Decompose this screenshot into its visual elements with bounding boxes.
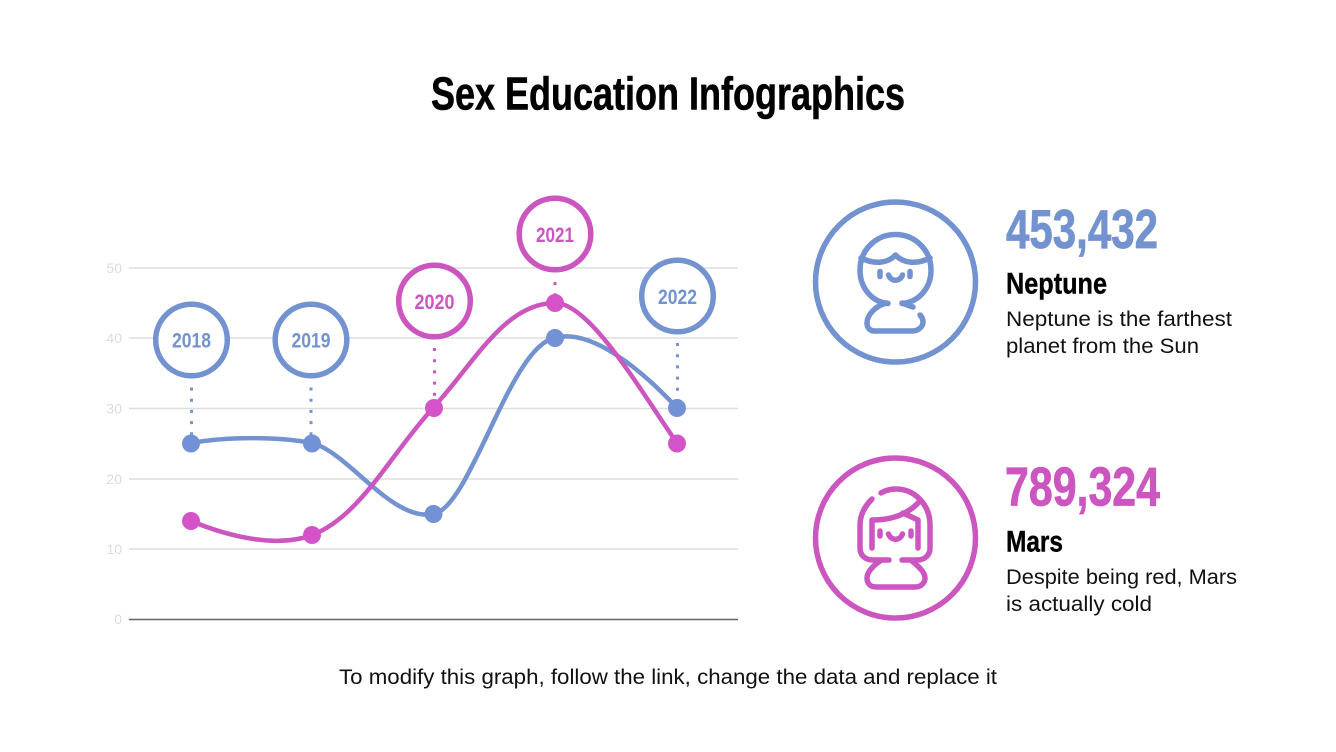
stat: Neptune: planet from the Sun bbox=[1006, 335, 1199, 358]
y axis labels: 30 bbox=[106, 400, 122, 416]
icon: girl in circle bbox=[816, 458, 976, 618]
line chart bbox=[106, 198, 738, 627]
icon: boy in circle bbox=[816, 202, 976, 362]
y axis labels: 20 bbox=[106, 471, 122, 487]
stat: Mars: 789,324 bbox=[1005, 456, 1160, 518]
year marker 2022: 2022 bbox=[658, 286, 697, 309]
stat: Mars: is actually cold bbox=[1006, 593, 1152, 616]
year marker 2019 bbox=[275, 304, 347, 436]
y axis labels: 0 bbox=[114, 611, 122, 627]
stat: Mars: Mars bbox=[1006, 526, 1063, 558]
stat: Neptune: 453,432 bbox=[1006, 198, 1158, 260]
year marker 2020: 2020 bbox=[414, 291, 454, 314]
y axis labels: 50 bbox=[106, 260, 122, 276]
blue series line bbox=[191, 336, 677, 515]
year marker 2021 bbox=[519, 198, 591, 296]
year marker 2020 bbox=[399, 265, 470, 399]
stat: Mars: Despite being red, Mars bbox=[1006, 566, 1237, 589]
year marker 2022 bbox=[642, 260, 713, 400]
stat: Neptune: Neptune is the farthest bbox=[1006, 308, 1232, 331]
caption: To modify this graph, follow the link, change the data and replace it bbox=[339, 666, 997, 689]
y axis labels: 40 bbox=[106, 330, 122, 346]
title: Sex Education Infographics bbox=[431, 68, 905, 120]
y axis labels bbox=[106, 260, 122, 627]
stat: Neptune: Neptune bbox=[1006, 268, 1107, 300]
magenta series line bbox=[191, 303, 677, 541]
stat: Mars bbox=[1005, 456, 1237, 616]
blue series markers bbox=[182, 329, 686, 523]
year marker 2018 bbox=[156, 304, 227, 436]
year marker 2018: 2018 bbox=[172, 330, 211, 352]
year marker 2019: 2019 bbox=[292, 330, 330, 352]
stat: Neptune bbox=[1006, 198, 1232, 358]
year marker 2021: 2021 bbox=[536, 224, 574, 247]
y axis labels: 10 bbox=[106, 541, 122, 557]
magenta series markers bbox=[182, 294, 686, 544]
